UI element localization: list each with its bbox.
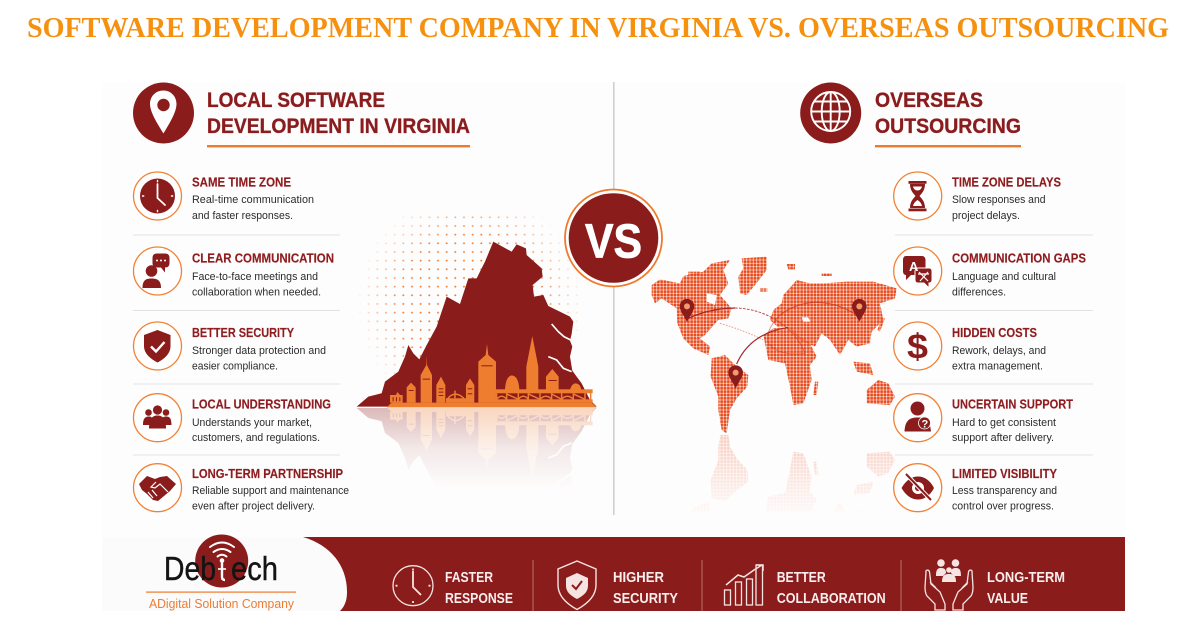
item: better security: BETTER SECURITY xyxy=(192,326,295,340)
title: SOFTWARE DEVELOPMENT COMPANY IN VIRGINIA VS. OVERSEAS OUTSOURCING xyxy=(27,12,1169,44)
item: clear communication: Face-to-face meetings and xyxy=(192,271,318,283)
benefit: faster response: FASTER xyxy=(445,570,493,586)
heading: local software development in Virginia: DEVELOPMENT IN VIRGINIA xyxy=(207,114,470,138)
logo: Debtech: ech xyxy=(231,550,278,587)
illustration: dotted world map with pins xyxy=(652,256,897,512)
panel: overseas outsourcing xyxy=(800,82,1093,512)
heading: overseas outsourcing: OUTSOURCING xyxy=(875,114,1021,138)
heading: overseas outsourcing xyxy=(875,88,1021,147)
item: hidden costs: HIDDEN COSTS xyxy=(952,326,1037,340)
item: long-term partnership xyxy=(134,464,349,512)
item: limited visibility xyxy=(894,464,1058,512)
benefit: better collaboration xyxy=(724,565,886,607)
halftone dots behind Virginia xyxy=(359,216,578,374)
benefit: higher security xyxy=(558,561,678,610)
connection arcs xyxy=(688,302,855,364)
central divider line xyxy=(613,82,615,515)
heading: local software development in Virginia: LOCAL SOFTWARE xyxy=(207,88,385,112)
benefit: better collaboration: COLLABORATION xyxy=(777,591,886,607)
item: time zone delays: Slow responses and xyxy=(952,194,1046,206)
item: better security xyxy=(134,322,326,372)
item: same time zone: Real-time communication xyxy=(192,194,314,206)
logo: Debtech xyxy=(146,534,296,611)
location pins xyxy=(680,299,867,389)
panel: infographic background xyxy=(102,82,1125,611)
Virginia silhouette and city skyline xyxy=(357,242,597,407)
item: communication gaps: A xyxy=(909,259,919,274)
item: uncertain support: UNCERTAIN SUPPORT xyxy=(952,397,1073,411)
item: uncertain support: Hard to get consistent xyxy=(952,417,1056,429)
item: communication gaps: Language and cultural xyxy=(952,271,1056,283)
logo: Debtech: Deb xyxy=(164,550,216,587)
item: clear communication: CLEAR COMMUNICATION xyxy=(192,252,334,266)
logo: Debtech: ADigital Solution Company xyxy=(149,597,295,611)
benefit: faster response: RESPONSE xyxy=(445,591,513,607)
item: same time zone xyxy=(134,172,314,222)
illustration: Virginia map with skyline xyxy=(357,210,597,573)
item: long-term partnership: Reliable support and maintenance xyxy=(192,485,349,497)
item: better security: easier compliance. xyxy=(192,360,278,372)
item: hidden costs: Rework, delays, and xyxy=(952,345,1046,357)
item: communication gaps: COMMUNICATION GAPS xyxy=(952,252,1086,266)
item: limited visibility: control over progress. xyxy=(952,500,1054,512)
bar background xyxy=(102,537,1125,611)
panel: bottom benefits bar xyxy=(102,534,1125,611)
benefit: higher security: SECURITY xyxy=(613,591,678,607)
item: time zone delays xyxy=(894,172,1061,222)
panel: local software development in Virginia xyxy=(133,82,470,512)
benefit: faster response xyxy=(393,566,513,607)
benefit: long-term value: LONG-TERM xyxy=(987,570,1065,586)
heading: overseas outsourcing: OVERSEAS xyxy=(875,88,983,112)
item: communication gaps xyxy=(894,247,1086,298)
map reflection xyxy=(690,435,895,512)
item: better security: Stronger data protection and xyxy=(192,345,326,357)
benefit: higher security: HIGHER xyxy=(613,570,664,586)
world map dots xyxy=(652,257,897,433)
icon: location pin badge xyxy=(133,82,194,144)
icon: globe badge xyxy=(800,82,861,144)
VS badge: VS xyxy=(585,216,642,268)
item: uncertain support xyxy=(894,394,1073,444)
item: time zone delays: TIME ZONE DELAYS xyxy=(952,176,1061,190)
item: clear communication: collaboration when needed. xyxy=(192,286,321,298)
benefit: better collaboration: BETTER xyxy=(777,570,826,586)
item: local understanding xyxy=(134,394,331,444)
benefit: long-term value: VALUE xyxy=(987,591,1028,607)
item: hidden costs: $ xyxy=(907,328,928,366)
item: communication gaps: differences. xyxy=(952,286,1006,298)
benefit: long-term value xyxy=(925,559,1065,610)
logo panel xyxy=(102,537,347,611)
item: local understanding: LOCAL UNDERSTANDING xyxy=(192,397,331,411)
item: uncertain support: ? xyxy=(922,418,928,430)
skyline reflection xyxy=(356,408,596,473)
item: long-term partnership: even after project delivery. xyxy=(192,500,315,512)
heading: local software development in Virginia xyxy=(207,88,470,147)
item: limited visibility: LIMITED VISIBILITY xyxy=(952,467,1058,481)
item: limited visibility: Less transparency and xyxy=(952,485,1057,497)
item: hidden costs: extra management. xyxy=(952,360,1043,372)
item: time zone delays: project delays. xyxy=(952,210,1020,222)
item: long-term partnership: LONG-TERM PARTNERSHIP xyxy=(192,467,343,481)
item: local understanding: Understands your market, xyxy=(192,417,312,429)
VS badge xyxy=(565,190,662,286)
item: clear communication xyxy=(134,247,334,298)
item: same time zone: and faster responses. xyxy=(192,210,293,222)
item: same time zone: SAME TIME ZONE xyxy=(192,176,291,190)
item: uncertain support: support after delivery. xyxy=(952,432,1054,444)
item: hidden costs xyxy=(894,322,1046,372)
item: local understanding: customers, and regulations. xyxy=(192,432,320,444)
